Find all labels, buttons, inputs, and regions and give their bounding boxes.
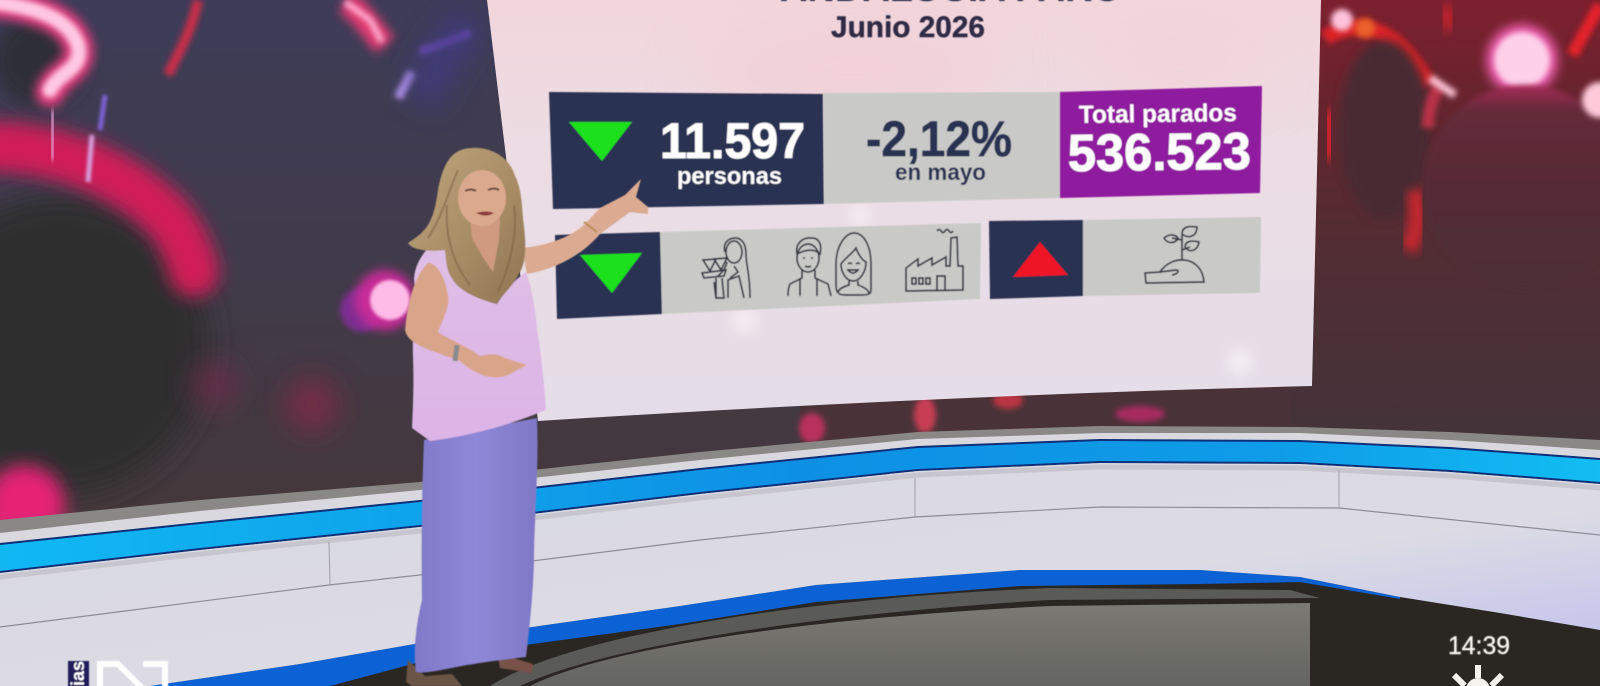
- sandals: [406, 660, 462, 686]
- panel: monthly decrease: [549, 92, 824, 209]
- icon: green down arrow: [580, 253, 642, 293]
- panel: percentage in May: [823, 92, 1060, 204]
- raised arm: [522, 179, 648, 274]
- date heading: Junio 2026: [831, 11, 985, 44]
- icon: factory: [906, 230, 963, 291]
- background: blurred concert lights, left: [0, 0, 800, 560]
- lower arm: [405, 263, 527, 377]
- label: total: Total parados: [1079, 99, 1237, 129]
- skirt: [415, 418, 537, 673]
- background: blurred concert lights, right: [799, 0, 1600, 560]
- channel logo: ias: [68, 661, 88, 686]
- icon: hospitality worker: [702, 238, 750, 298]
- floor: [0, 540, 1600, 686]
- icon: young man: [788, 238, 831, 296]
- label: May: en mayo: [895, 159, 986, 185]
- icon: green down arrow: [569, 122, 632, 161]
- channel sun logo: [1452, 665, 1504, 686]
- logo bracket N: [100, 664, 165, 686]
- studio wall with blue light bands: [0, 426, 1600, 686]
- channel logo: [68, 661, 165, 686]
- number: total: 536.523: [1067, 123, 1251, 183]
- number: people: 11.597: [660, 113, 805, 169]
- panel: agriculture going up: [989, 217, 1261, 299]
- hair: [408, 148, 525, 304]
- blouse: [412, 236, 546, 441]
- icon: young woman: [836, 233, 871, 295]
- icon: red up arrow: [1013, 242, 1068, 277]
- neck: [470, 218, 500, 272]
- number: percentage: -2,12%: [866, 111, 1012, 167]
- presenter: [405, 148, 648, 686]
- clock: 14:39: [1448, 632, 1510, 660]
- panel: sectors going down: [555, 223, 981, 319]
- icon: hand holding plant: [1145, 227, 1204, 283]
- label: people: personas: [677, 163, 782, 190]
- lower blue band: [150, 570, 1400, 686]
- panel: total unemployed: [1060, 86, 1262, 198]
- face: [458, 170, 506, 226]
- wall screen panel: [487, 0, 1321, 421]
